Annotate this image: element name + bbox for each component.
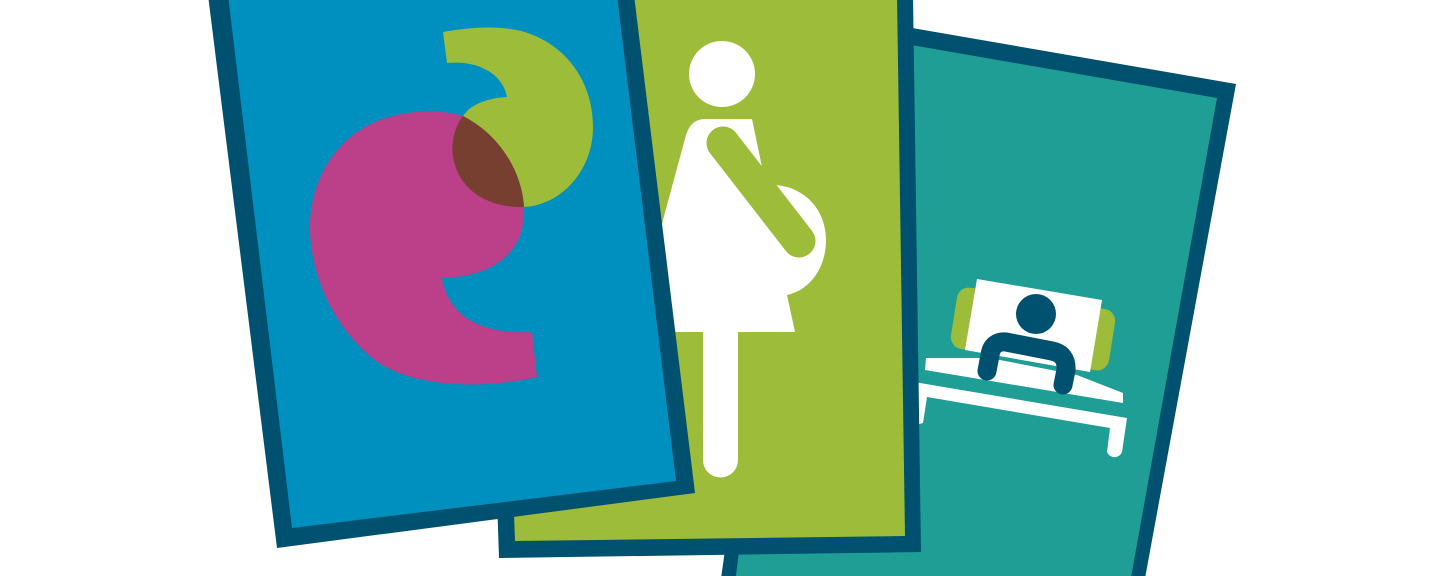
card: green with pregnant woman — [480, 0, 921, 558]
card: blue with speech bubbles — [208, 0, 695, 548]
icon: pregnant woman — [640, 41, 826, 478]
card: teal with patient in bed — [718, 22, 1236, 576]
icon: patient in bed — [912, 279, 1127, 457]
icon: pink speech bubble — [310, 111, 537, 384]
icon: green speech bubble — [443, 27, 593, 207]
icon: bubble overlap — [452, 116, 524, 207]
